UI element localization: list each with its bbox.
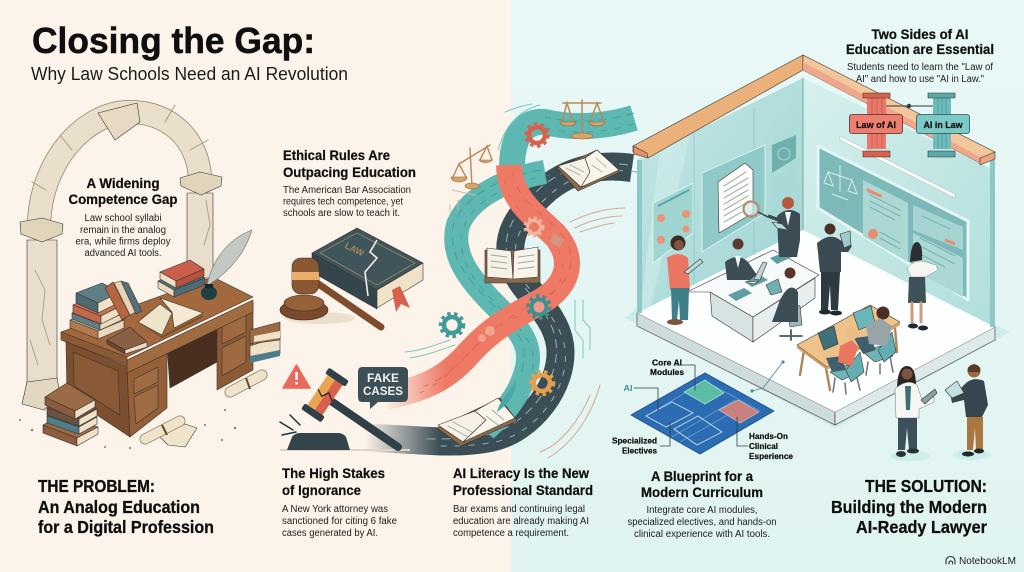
text block: a widening competence gap: era, while firms deploy <box>76 236 170 248</box>
heading: the solution <box>831 476 987 537</box>
title: Why Law Schools Need an AI Revolution <box>31 64 348 84</box>
icon: warning triangle <box>283 365 310 388</box>
heading: the solution: Building the Modern <box>831 497 987 517</box>
illustration: book stacks and scrolls on floor <box>43 322 280 447</box>
floor platform <box>637 230 995 425</box>
heading: the problem: THE PROBLEM: <box>38 476 155 496</box>
person: seated woman at desk <box>766 268 802 340</box>
icon: gear orange <box>530 372 554 394</box>
open book on desk <box>138 298 203 338</box>
wooden table with students <box>797 305 900 394</box>
label: core AI modules: Modules <box>650 367 684 377</box>
icon: fake cases speech bubble: CASES <box>363 386 403 398</box>
text block: blueprint for a modern curriculum: Integrate core AI modules, <box>646 505 758 516</box>
illustration: cracked law book <box>312 228 423 312</box>
text block: blueprint for a modern curriculum: Modern Curriculum <box>641 484 763 500</box>
floor shadow <box>625 308 1010 428</box>
person: woman at screen <box>907 242 938 330</box>
text block: ethical rules: requires tech competence, yet <box>283 196 403 208</box>
icon: fake cases speech bubble: FAKE <box>367 373 399 385</box>
text block: a widening competence gap: Competence Gap <box>68 192 178 207</box>
illustration: two lawyers with tablets <box>890 364 991 461</box>
text block: two sides of AI: Students need to learn the "Law of <box>847 62 993 73</box>
text block: a widening competence gap: advanced AI tools. <box>84 248 162 259</box>
text block: two sides of AI: Education are Essential <box>846 42 994 57</box>
text block: AI literacy: competence a requirement. <box>453 528 569 539</box>
connector to room <box>752 362 783 391</box>
text block: a widening competence gap: A Widening <box>86 176 160 191</box>
heading: the problem: An Analog Education <box>38 497 200 517</box>
logo: NotebookLM: NotebookLM <box>959 556 1016 567</box>
title <box>31 20 348 84</box>
label: AI <box>624 383 658 411</box>
pillar: law of AI: Law of AI <box>856 120 896 131</box>
icon: open book bottom with quill <box>437 381 517 446</box>
text block: high stakes of ignorance <box>282 465 397 539</box>
text block: ethical rules <box>283 148 416 219</box>
icon: gear coral <box>526 124 548 146</box>
lawyer in white coat <box>890 366 937 461</box>
left glass wall <box>637 78 803 313</box>
text block: high stakes of ignorance: cases generated by AI. <box>282 528 378 539</box>
wall panels small <box>772 135 796 202</box>
text block: a widening competence gap <box>68 176 178 259</box>
lawyer in dark jacket <box>945 364 991 460</box>
illustration: antique wooden desk <box>61 277 253 437</box>
background: problem side <box>0 0 512 572</box>
icon: brass scales left <box>451 145 492 189</box>
label: hands-on clinical experience: Hands-On <box>749 431 788 441</box>
label: specialized electives <box>612 422 670 456</box>
text block: AI literacy: Bar exams and continuing legal <box>453 504 585 515</box>
text block: ethical rules: schools are slow to teach it. <box>283 208 400 219</box>
label: core AI modules: Core AI <box>652 358 682 368</box>
text block: AI literacy: AI Literacy Is the New <box>453 465 589 481</box>
text block: two sides of AI <box>846 27 994 85</box>
text block: ethical rules: Ethical Rules Are <box>283 148 390 163</box>
illustration: dark gavel with crack <box>280 368 410 451</box>
label: hands-on clinical experience: Clinical <box>749 441 778 451</box>
icon: brass scales top <box>560 100 605 139</box>
ribbon: teal lower <box>452 170 550 430</box>
heading: the problem: for a Digital Profession <box>38 517 214 537</box>
illustration: wooden gavel <box>280 258 381 327</box>
wall panel document <box>702 145 765 252</box>
label: hands-on clinical experience: Esperience <box>749 451 793 461</box>
laptop right <box>853 306 875 330</box>
text block: blueprint for a modern curriculum: clinical experience with AI tools. <box>634 529 770 540</box>
text block: a widening competence gap: remain in the analog <box>80 225 166 236</box>
ribbon: teal upper <box>512 113 634 168</box>
icon: ink bottle and quill <box>201 230 252 300</box>
illustration: ruined stone arch <box>20 103 222 410</box>
illustration: intertwined ribbons <box>365 113 637 446</box>
heading: the problem <box>38 476 214 537</box>
icon: gear teal <box>440 314 464 336</box>
student seated in coral <box>826 326 864 394</box>
illustration: cracked law book: LAW <box>343 240 366 259</box>
student seated in gray <box>854 306 896 375</box>
icon: fake cases speech bubble <box>358 367 408 409</box>
roof beam <box>633 55 995 165</box>
callout: two pillars <box>850 93 970 157</box>
text block: high stakes of ignorance: sanctioned for citing 6 fake <box>282 516 397 527</box>
heading: the solution: AI-Ready Lawyer <box>856 517 987 537</box>
label: AI: AI <box>624 383 632 393</box>
shelf light bar <box>840 136 955 198</box>
book stack left <box>70 281 142 339</box>
illustration: floor dust <box>19 409 236 449</box>
title: Closing the Gap: <box>32 20 315 61</box>
laptop left <box>818 326 838 350</box>
text block: blueprint for a modern curriculum <box>628 468 776 540</box>
text block: blueprint for a modern curriculum: A Blueprint for a <box>651 468 753 484</box>
text block: high stakes of ignorance: of Ignorance <box>282 482 361 498</box>
text block: high stakes of ignorance: The High Stakes <box>282 465 385 481</box>
background: solution side <box>511 0 1024 572</box>
book stack red <box>158 260 205 297</box>
text block: ethical rules: Outpacing Education <box>283 165 416 180</box>
text block: AI literacy <box>453 465 593 539</box>
person: standing man with tablet <box>817 224 852 316</box>
icon: gear pale on ribbon <box>525 218 543 236</box>
icon: open book top right <box>557 150 620 191</box>
text block: two sides of AI: AI" and how to use "AI in Law." <box>856 74 984 85</box>
illustration: books, ink and papers on desk <box>70 230 252 354</box>
text block: ethical rules: The American Bar Association <box>283 185 411 196</box>
text block: a widening competence gap: Law school syllabi <box>84 213 162 224</box>
icon: magnifier <box>744 202 768 217</box>
icon: open book middle <box>485 247 540 283</box>
label: hands-on clinical experience <box>737 417 793 461</box>
diagram: curriculum blueprint <box>612 358 793 461</box>
ribbon: coral <box>385 165 571 397</box>
person: seated man with laptop <box>725 238 767 284</box>
wall panel left <box>653 183 693 263</box>
text block: AI literacy: education are already making AI <box>453 516 589 527</box>
module: clinical <box>719 400 759 423</box>
text block: blueprint for a modern curriculum: specialized electives, and hands-on <box>628 517 776 528</box>
module: core AI <box>684 380 724 404</box>
illustration: swoosh lines and circuits <box>405 104 625 458</box>
label: specialized electives: Specialized <box>612 436 657 446</box>
person: woman with magnifier <box>768 197 800 257</box>
closed leather book <box>107 327 147 354</box>
pillar: AI in law: AI in Law <box>924 120 963 131</box>
center desk <box>687 250 819 342</box>
label: specialized electives: Electives <box>622 446 657 456</box>
label: core AI modules <box>650 358 695 390</box>
illustration: isometric classroom <box>625 55 1010 428</box>
text block: AI literacy: Professional Standard <box>453 482 593 498</box>
wall screen <box>818 146 968 300</box>
right glass wall <box>803 78 995 327</box>
heading: the solution: THE SOLUTION: <box>865 476 987 496</box>
person: analyst in orange <box>667 236 703 325</box>
icon: gear teal on ribbon <box>528 296 550 318</box>
text block: two sides of AI: Two Sides of AI <box>872 27 968 42</box>
ribbon: dark <box>365 164 637 446</box>
text block: high stakes of ignorance: A New York attorney was <box>282 504 388 515</box>
